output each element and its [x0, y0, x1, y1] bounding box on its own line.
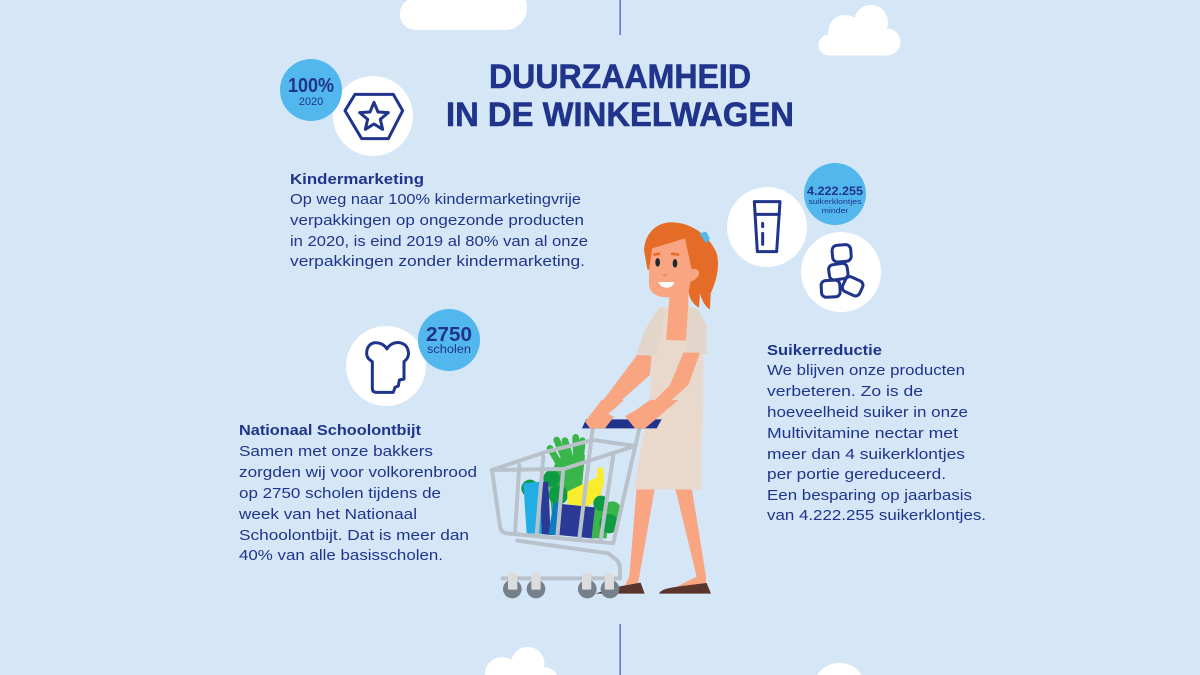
text block: schoolontbijt: week van het Nationaal — [238, 506, 417, 523]
text block: suikerreductie: Multivitamine nectar met — [767, 425, 959, 442]
cloud: bottom left — [485, 647, 557, 675]
text block: kindermarketing — [290, 171, 588, 270]
woman: hands on the cart handle — [585, 400, 678, 428]
woman: forearms — [598, 353, 700, 410]
woman: head, hair and upper body — [637, 222, 718, 410]
badge: 100% 2020: 100% — [288, 75, 334, 97]
cloud: top centre — [400, 0, 527, 30]
text block: kindermarketing: Kindermarketing — [290, 171, 424, 188]
badge: 4.222.255 suikerklontjes minder — [804, 163, 866, 225]
panel: kindermarketing icons — [280, 59, 413, 156]
badge: 2750 scholen — [418, 309, 480, 371]
icon: white circle with bread — [346, 326, 426, 406]
panel: suikerreductie icons — [727, 163, 881, 312]
badge: 4.222.255 suikerklontjes minder: minder — [822, 206, 849, 215]
text block: suikerreductie — [767, 342, 986, 524]
text block: kindermarketing: in 2020, is eind 2019 al 80% van al onze — [290, 233, 588, 250]
woman: skirt — [634, 395, 703, 490]
text block: schoolontbijt: zorgden wij voor volkorenbrood — [239, 464, 477, 481]
icon: white circle with hexagon star — [333, 76, 413, 156]
timeline line: bottom — [620, 624, 621, 675]
badge: 2750 scholen: 2750 — [426, 324, 472, 346]
shopping cart contents — [521, 437, 621, 538]
text block: suikerreductie: Suikerreductie — [767, 342, 882, 359]
illustration: woman with shopping cart — [492, 222, 718, 598]
text block: schoolontbijt: Nationaal Schoolontbijt — [239, 422, 421, 439]
text block: suikerreductie: Een besparing op jaarbasis — [767, 487, 972, 504]
text block: suikerreductie: We blijven onze producten — [767, 362, 965, 379]
text block: suikerreductie: van 4.222.255 suikerklontjes. — [767, 507, 986, 524]
badge: 4.222.255 suikerklontjes minder: suikerklontjes — [808, 197, 862, 206]
title: DUURZAAMHEID — [489, 58, 751, 96]
text block: suikerreductie: hoeveelheid suiker in onze — [767, 404, 968, 421]
timeline line: top — [620, 0, 621, 35]
text block: schoolontbijt: op 2750 scholen tijdens de — [239, 485, 441, 502]
text block: kindermarketing: verpakkingen zonder kindermarketing. — [290, 253, 585, 270]
woman: legs and shoes — [595, 487, 711, 594]
text block: suikerreductie: per portie gereduceerd. — [767, 466, 946, 483]
title: IN DE WINKELWAGEN — [446, 96, 794, 134]
badge: 2750 scholen: scholen — [427, 344, 471, 356]
text block: schoolontbijt: 40% van alle basisscholen. — [239, 547, 443, 564]
panel: schoolontbijt icons — [346, 309, 480, 406]
badge: 4.222.255 suikerklontjes minder: 4.222.255 — [807, 184, 863, 198]
cloud: bottom right — [817, 663, 862, 675]
badge: 100% 2020: 2020 — [299, 96, 323, 108]
shopping cart frame and wheels — [492, 419, 662, 598]
title — [446, 58, 794, 134]
text block: suikerreductie: meer dan 4 suikerklontjes — [767, 446, 965, 463]
badge: 100% 2020 — [280, 59, 342, 121]
icon: white circle with glass — [727, 187, 807, 267]
icon: white circle with sugar cubes — [801, 232, 881, 312]
text block: schoolontbijt: Schoolontbijt. Dat is meer dan — [239, 527, 469, 544]
text block: kindermarketing: verpakkingen op ongezonde producten — [290, 212, 584, 229]
text block: schoolontbijt: Samen met onze bakkers — [239, 443, 433, 460]
cloud: top right — [818, 5, 900, 56]
text block: suikerreductie: verbeteren. Zo is de — [767, 383, 923, 400]
text block: schoolontbijt — [238, 422, 477, 564]
text block: kindermarketing: Op weg naar 100% kindermarketingvrije — [290, 191, 581, 208]
